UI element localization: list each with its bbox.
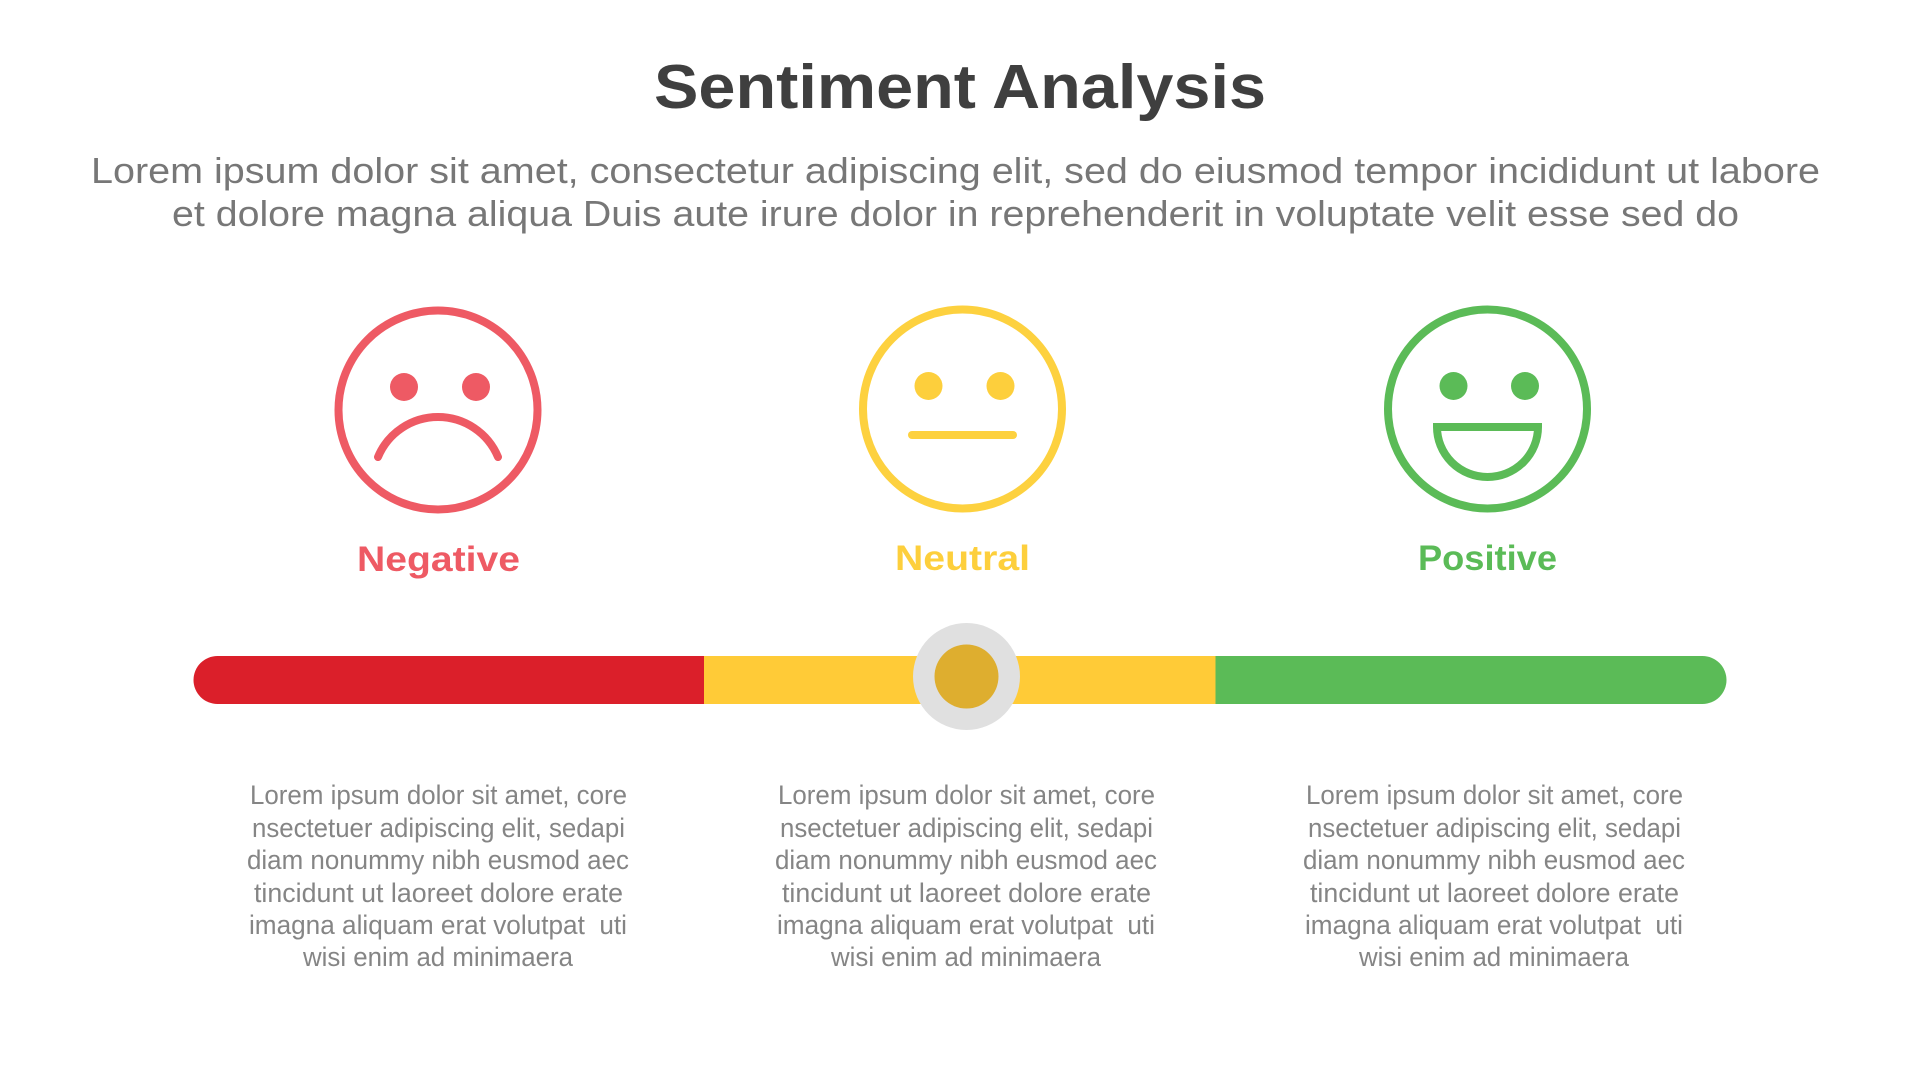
text block: positive description: wisi enim ad minimaera [1358, 942, 1630, 972]
text block: negative description: imagna aliquam erat volutpat uti [249, 910, 627, 940]
text block: positive description: tincidunt ut laoreet dolore erate [1310, 878, 1679, 908]
title: Sentiment Analysis [654, 53, 1266, 122]
text block: neutral description [775, 780, 1157, 972]
text block: neutral description: tincidunt ut laoreet dolore erate [782, 878, 1151, 908]
slider knob [913, 623, 1020, 730]
text block: negative description: wisi enim ad minimaera [302, 942, 574, 972]
subtitle text block: Lorem ipsum dolor sit amet, consectetur adipiscing elit, sed do eiusmod tempor incididunt ut labore [91, 150, 1820, 191]
text block: negative description: diam nonummy nibh eusmod aec [247, 845, 629, 875]
subtitle text block: et dolore magna aliqua Duis aute irure dolor in reprehenderit in voluptate velit esse sed do [172, 193, 1739, 234]
icon: neutral face [863, 310, 1062, 508]
sentiment scale bar [194, 623, 1726, 730]
text block: neutral description: nsectetuer adipiscing elit, sedapi [780, 813, 1153, 843]
text block: negative description [247, 780, 629, 972]
icon: sad face [338, 310, 538, 510]
text block: positive description: diam nonummy nibh eusmod aec [1303, 845, 1685, 875]
panel: neutral [863, 310, 1062, 578]
text block: neutral description: imagna aliquam erat volutpat uti [777, 910, 1155, 940]
text block: neutral description: wisi enim ad minimaera [830, 942, 1102, 972]
text block: positive description: Lorem ipsum dolor sit amet, core [1306, 780, 1683, 810]
label: neutral: Neutral [895, 539, 1030, 578]
bar segment: neutral [704, 656, 1216, 704]
label: positive: Positive [1418, 539, 1557, 578]
text block: negative description: tincidunt ut laoreet dolore erate [254, 878, 623, 908]
text block: positive description [1303, 780, 1685, 972]
label: negative: Negative [357, 540, 520, 579]
bar segment: negative [194, 656, 704, 704]
icon: happy face [1388, 310, 1587, 508]
bar segment: positive [1216, 656, 1726, 704]
text block: positive description: nsectetuer adipiscing elit, sedapi [1308, 813, 1681, 843]
subtitle text block [91, 150, 1820, 234]
text block: positive description: imagna aliquam erat volutpat uti [1305, 910, 1683, 940]
text block: negative description: Lorem ipsum dolor sit amet, core [250, 780, 627, 810]
panel: positive [1388, 310, 1587, 578]
text block: negative description: nsectetuer adipiscing elit, sedapi [252, 813, 625, 843]
panel: negative [338, 310, 538, 579]
text block: neutral description: diam nonummy nibh eusmod aec [775, 845, 1157, 875]
text block: neutral description: Lorem ipsum dolor sit amet, core [778, 780, 1155, 810]
